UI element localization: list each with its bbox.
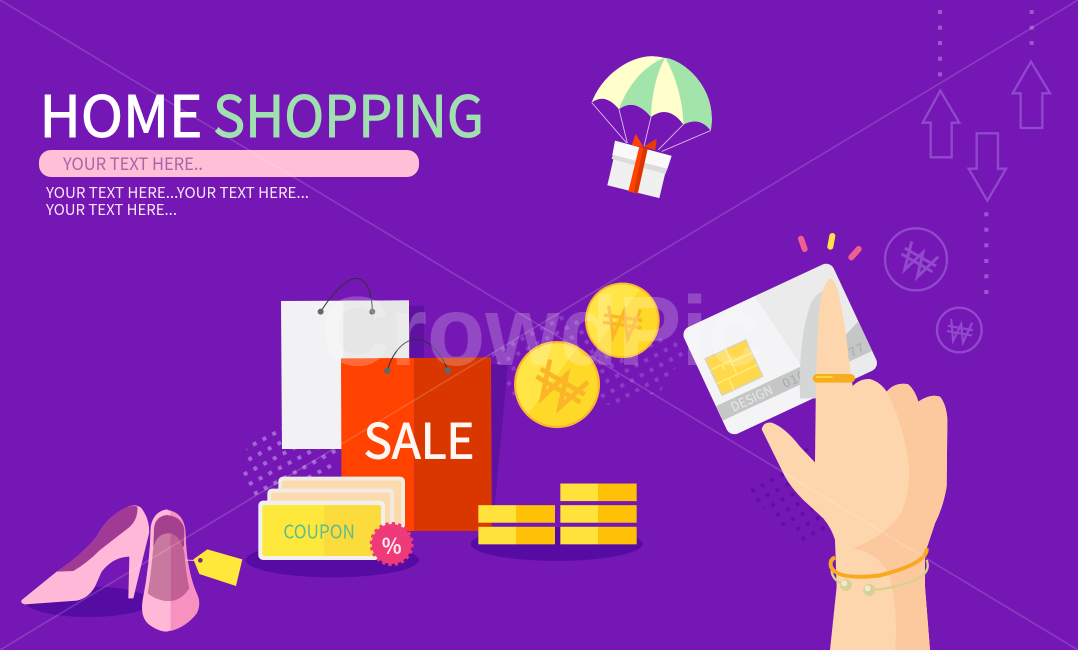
- middle coupon: [267, 489, 394, 549]
- icon: parachute gift: [592, 56, 712, 198]
- ring: [813, 374, 855, 383]
- coins: [471, 283, 660, 561]
- finger shadow on card: [800, 291, 824, 398]
- price tag: [185, 549, 242, 586]
- left shoe: [21, 506, 149, 604]
- white bag: [281, 278, 424, 449]
- back coupon: [278, 477, 405, 537]
- shoes: [21, 506, 242, 632]
- front coupon: COUPON: [283, 516, 355, 544]
- subtitle pill: YOUR TEXT HERE..: [62, 150, 203, 175]
- arrow: up right: [1013, 62, 1050, 128]
- credit card: 01012345677: [779, 337, 867, 392]
- body text: [45, 182, 309, 220]
- coupons: [246, 477, 419, 577]
- icon: won circle large: [885, 228, 947, 290]
- parachute canopy: [592, 56, 712, 131]
- title: SHOPPING: [213, 72, 484, 154]
- card text: DESIGN: [727, 379, 776, 416]
- front coupon: [258, 501, 385, 560]
- halftone dots: behind coins: [492, 315, 690, 405]
- shoe shadow: [25, 586, 152, 617]
- coupon shadow: [246, 543, 419, 577]
- arrow: up left: [923, 91, 959, 157]
- body text: YOUR TEXT HERE...YOUR TEXT HERE...: [45, 182, 309, 203]
- bracelets: [831, 548, 928, 596]
- watermark: CrowdPic: [321, 276, 761, 386]
- shopping bags: [281, 278, 508, 531]
- small won coin: [585, 283, 660, 358]
- decorative outline elements: [885, 10, 1050, 352]
- gift box: [607, 134, 672, 198]
- halftone dots: behind bags: [240, 427, 340, 500]
- percent badge: [371, 523, 412, 565]
- large won coin: [514, 341, 600, 428]
- stacked coin bars: [478, 484, 637, 544]
- right shoe: [142, 509, 199, 632]
- body text: YOUR TEXT HERE...: [45, 199, 177, 220]
- stacked coins shadow: [471, 527, 643, 561]
- credit card: [679, 260, 883, 438]
- hand: [762, 278, 947, 650]
- arrow: down: [969, 133, 1006, 201]
- title: [40, 72, 484, 154]
- subtitle pill: [39, 150, 419, 177]
- halftone dots: behind hand: [746, 443, 850, 544]
- title: HOME: [40, 72, 202, 154]
- parachute strings: [592, 102, 711, 151]
- percent badge: %: [382, 529, 402, 559]
- red bag: [341, 339, 508, 531]
- sale text: SALE: [364, 402, 474, 472]
- card chip: [705, 340, 763, 395]
- icon: won circle small: [937, 308, 982, 352]
- sparkle marks: [801, 236, 859, 257]
- dotted trails: [938, 10, 1034, 294]
- card and hand: [679, 236, 947, 650]
